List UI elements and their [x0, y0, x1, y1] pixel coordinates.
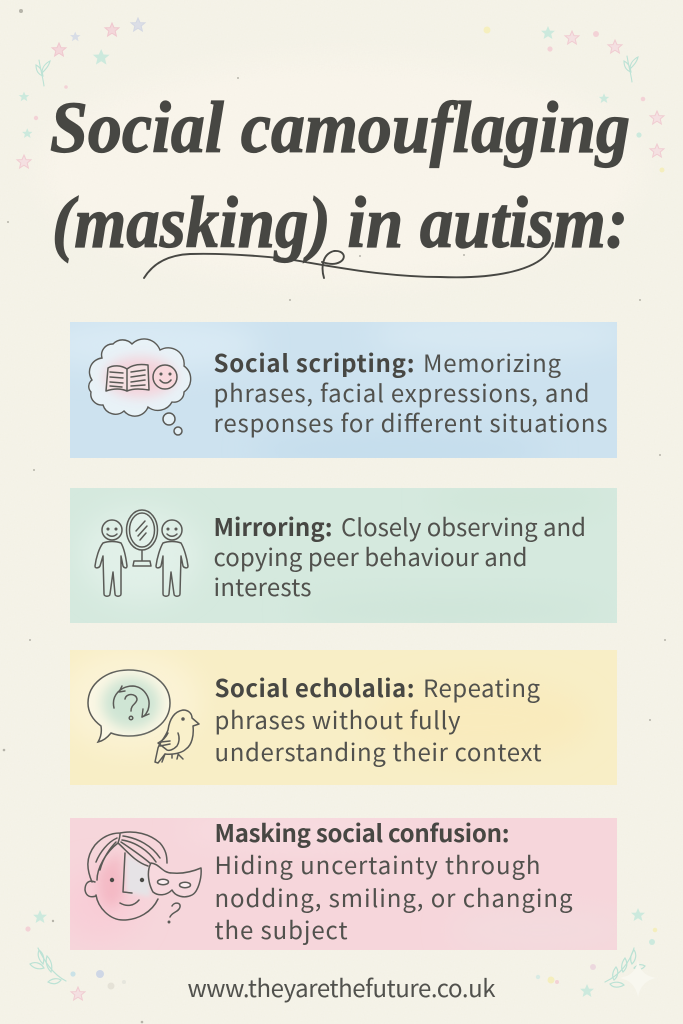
- mirror: [126, 510, 158, 566]
- text: social scripting: phrases, facial expressions, and: [214, 374, 590, 409]
- icon detail: smiley: [153, 365, 177, 389]
- icon detail: green blush: [102, 677, 160, 729]
- icon: two people and mirror: [95, 510, 188, 596]
- text: social echolalia: Social echolalia:: [214, 669, 414, 704]
- icon detail: ear: [85, 881, 96, 897]
- text: mirroring: Mirroring:: [214, 508, 332, 543]
- title: [50, 87, 630, 278]
- text: social scripting: Memorizing: [423, 344, 561, 379]
- panel: mirroring: [70, 484, 617, 626]
- decoration: bottom left leaf and stars: [25, 910, 126, 1000]
- icon detail: pink cloud blush: [104, 357, 176, 397]
- text: social echolalia: Repeating: [423, 669, 540, 704]
- icon detail: question mark: [168, 903, 180, 923]
- icon detail: cheek blush: [98, 850, 125, 910]
- footer website: www.theyarethefuture.co.uk: [188, 969, 496, 1004]
- icon detail: arrows and question mark: [113, 686, 149, 720]
- text: social scripting: Social scripting:: [214, 344, 414, 379]
- panel: social scripting: [70, 322, 617, 458]
- title: (masking) in autism:: [52, 182, 628, 263]
- text: social scripting: responses for different situations: [214, 404, 608, 439]
- text: masking social confusion: the subject: [214, 911, 348, 946]
- text: masking social confusion: Hiding uncertainty through: [214, 846, 540, 881]
- title underline swash: [144, 243, 553, 278]
- icon: speech bubble with looping question mark: [88, 670, 199, 763]
- text: masking social confusion: Masking social confusion:: [214, 814, 510, 849]
- text: masking social confusion: nodding, smiling, or changing: [214, 879, 573, 914]
- text: mirroring: interests: [214, 568, 312, 603]
- left person: [95, 520, 127, 596]
- decoration: top right stars and leaf: [484, 26, 664, 172]
- text: mirroring: Closely observing and: [341, 508, 586, 543]
- decoration: bottom right leaf and stars: [536, 908, 657, 997]
- icon detail: hair: [88, 832, 167, 882]
- right person: [156, 520, 188, 596]
- icon detail: open book: [106, 364, 149, 391]
- icon detail: jaw: [96, 895, 158, 920]
- icon detail: bird: [155, 710, 199, 763]
- icon detail: smile: [120, 900, 139, 905]
- icon: thought bubble with book and smiley: [89, 339, 191, 435]
- title: Social camouflaging: [50, 87, 630, 168]
- panel: masking social confusion: [60, 814, 630, 950]
- icon: face with hair and mask: [85, 832, 201, 923]
- icon detail: thought dots: [163, 413, 182, 435]
- decoration: top left stars and leaf: [17, 18, 145, 168]
- text: social echolalia: phrases without fully: [214, 701, 461, 736]
- text: social echolalia: understanding their context: [214, 733, 542, 768]
- icon detail: nose: [123, 853, 132, 893]
- icon detail: mask: [148, 863, 201, 897]
- text: mirroring: copying peer behaviour and: [214, 538, 528, 573]
- icon detail: shaded face half: [126, 854, 150, 897]
- panel: social echolalia: [60, 650, 617, 785]
